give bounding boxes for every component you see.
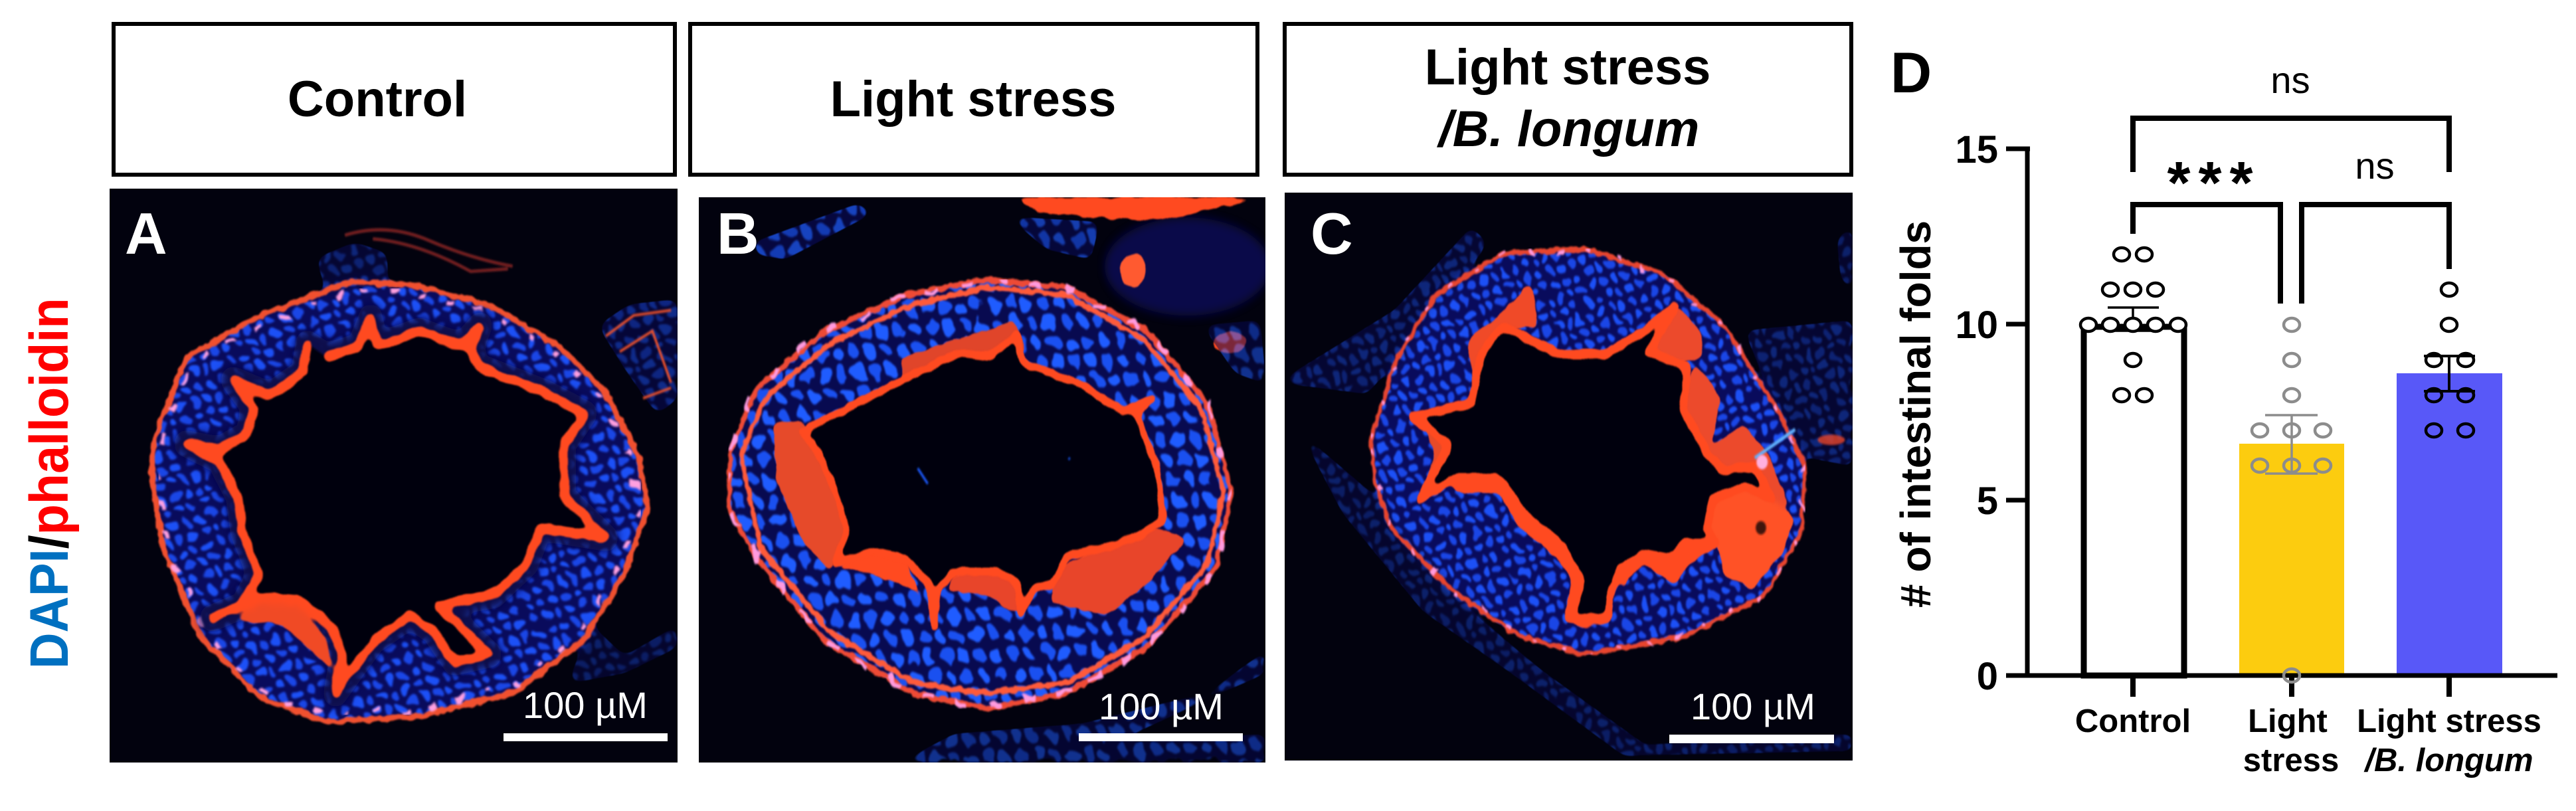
x tick labels: Light bbox=[2248, 703, 2328, 739]
x tick labels: stress bbox=[2243, 743, 2339, 778]
scale bar B bbox=[1079, 685, 1243, 741]
y tick labels: 15 bbox=[1955, 128, 1998, 171]
letter A: A bbox=[125, 201, 167, 266]
scale bar A bbox=[504, 684, 668, 741]
letter D: D bbox=[1890, 41, 1932, 105]
scale bar B: 100 µM bbox=[1099, 685, 1224, 727]
light stress B. longum data points bbox=[2424, 283, 2475, 437]
heading box: Light stress / B. longum: Light stress bbox=[1425, 39, 1710, 96]
heading box: Control bbox=[112, 22, 677, 177]
panel D: bar chart of intestinal folds bbox=[1890, 41, 2557, 778]
axes bbox=[2006, 149, 2557, 697]
micrograph A bbox=[110, 189, 678, 763]
y tick labels: 10 bbox=[1955, 304, 1998, 347]
y tick labels: 0 bbox=[1977, 655, 1998, 698]
x tick labels: Light stress bbox=[2357, 703, 2541, 739]
heading box: Control: Control bbox=[288, 71, 467, 128]
micrograph C bbox=[1285, 193, 1853, 761]
light stress data points bbox=[2252, 318, 2331, 682]
scale bar C: 100 µM bbox=[1691, 685, 1815, 727]
panel B: light stress micrograph bbox=[699, 197, 1265, 763]
x tick labels bbox=[2075, 703, 2541, 778]
heading box: Light stress / B. longum bbox=[1283, 22, 1853, 177]
significance labels bbox=[2167, 59, 2395, 217]
y axis title: # of intestinal folds bbox=[1892, 221, 1940, 608]
control data points bbox=[2080, 248, 2186, 402]
scale bar A: 100 µM bbox=[523, 684, 648, 726]
x tick labels: Control bbox=[2075, 703, 2191, 739]
significance labels: *** bbox=[2167, 150, 2261, 217]
significance brackets bbox=[2133, 118, 2449, 304]
side label: DAPI/phalloidin: DAPI/phalloidin bbox=[19, 298, 80, 669]
x tick labels: /B. longum bbox=[2363, 743, 2533, 778]
panel C: light stress B. longum micrograph bbox=[1285, 193, 1853, 761]
significance labels: ns bbox=[2270, 59, 2310, 101]
y tick labels bbox=[1955, 128, 1998, 698]
letter B: B bbox=[717, 201, 759, 266]
panel A: control micrograph bbox=[110, 189, 678, 763]
heading box: Light stress bbox=[688, 22, 1259, 177]
scale bar C bbox=[1669, 685, 1834, 743]
y tick labels: 5 bbox=[1977, 480, 1998, 523]
bars bbox=[2084, 327, 2502, 676]
letter C: C bbox=[1311, 201, 1353, 266]
significance labels: ns bbox=[2355, 145, 2395, 187]
micrograph B bbox=[699, 197, 1265, 763]
heading box: Light stress / B. longum: /B. longum bbox=[1437, 101, 1699, 157]
heading box: Light stress: Light stress bbox=[830, 71, 1116, 128]
